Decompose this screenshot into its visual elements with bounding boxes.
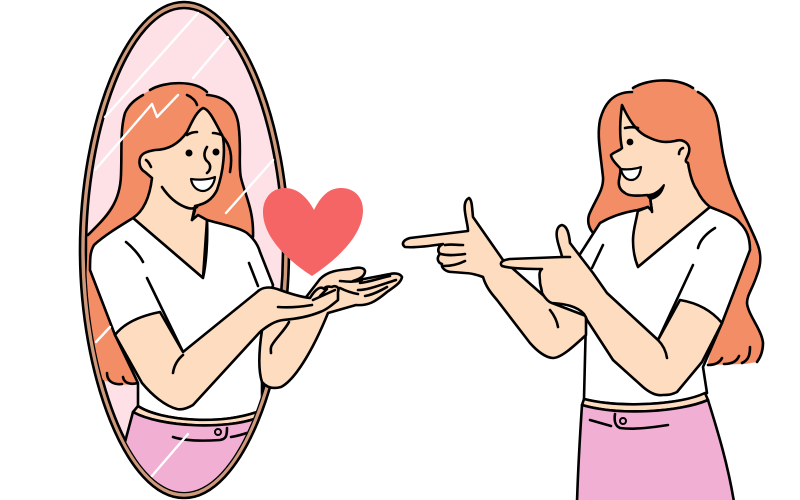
woman: shirt details [592,207,715,340]
reflection: woman inside mirror [84,13,273,500]
reflection shirt details [126,242,258,352]
woman: near arm and pointing hand [501,225,722,395]
woman: hair outline [588,80,763,365]
reflection facial features [146,132,231,220]
woman: hair [588,80,763,365]
mirror frame [80,2,289,498]
woman: shirt [575,207,750,404]
reflection shirt [90,218,273,420]
reflection front arm and hand [115,286,338,409]
reflection glare lines [95,13,273,477]
heart [263,188,363,276]
woman: pocket [590,414,668,429]
woman: far arm and pointing hand [403,198,586,358]
reflection face and neck [133,108,224,278]
reflection skirt [125,412,257,500]
woman: skirt [577,400,734,500]
woman: waistband [582,393,708,411]
woman: facial features [621,127,683,212]
woman: face and neck [611,105,710,267]
reflection waistband [133,406,262,425]
reflection back arm and open hand [259,268,402,388]
reflection pocket [173,428,250,441]
reflection hair [84,84,254,385]
reflection hair outline [88,83,253,384]
